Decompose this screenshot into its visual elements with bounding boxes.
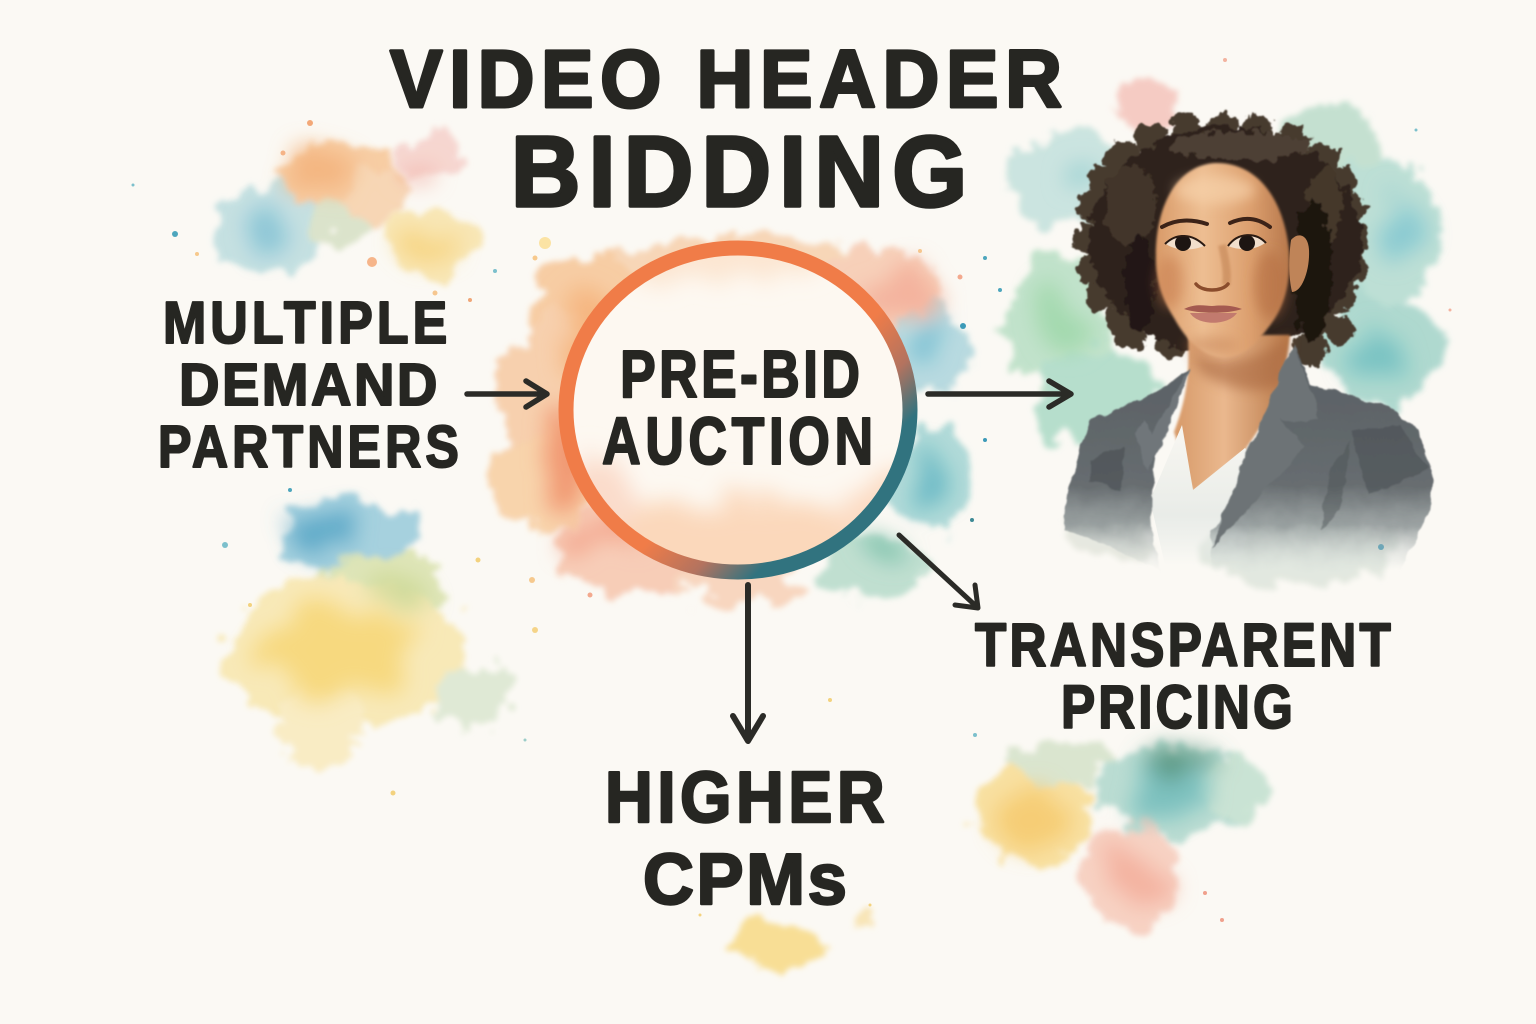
arrow: partners to auction [467,381,547,407]
label: higher CPMs: HIGHER [605,756,885,838]
label: transparent pricing: TRANSPARENT [975,611,1391,679]
lips [1184,305,1242,323]
eyes [1165,235,1266,251]
label: higher CPMs: CPMs [643,839,847,920]
label: multiple demand partners [158,290,459,480]
label: transparent pricing: PRICING [1061,673,1293,741]
cheek shading [1157,176,1286,353]
label: transparent pricing [975,611,1391,741]
eyebrows [1162,219,1270,227]
watercolor splash: lower left [227,499,515,767]
label: higher CPMs [605,756,885,920]
label: multiple demand partners: PARTNERS [158,413,459,480]
auction label: AUCTION [602,403,873,478]
arrow: auction to higher CPMs [733,585,763,741]
circle interior [568,250,908,570]
interior wash [580,256,893,564]
neck [1174,335,1290,492]
arrow: auction to portrait [928,381,1071,407]
neck shadow [1190,335,1290,390]
blazer shadows [1350,425,1428,495]
title [390,34,1062,227]
ear [1289,235,1309,292]
arrow: auction to transparent pricing [899,535,978,608]
paint splatter dots [132,58,1452,922]
blazer lapel [1212,343,1318,548]
label: multiple demand partners: MULTIPLE [163,290,447,356]
label: multiple demand partners: DEMAND [179,353,437,418]
nose [1196,245,1228,290]
gradient ring [566,248,910,572]
blazer [1063,343,1433,585]
title: BIDDING [511,115,967,227]
watercolor splash: bottom [722,914,876,969]
title: VIDEO HEADER [390,34,1062,125]
shirt [1150,425,1262,565]
watercolor splash: behind auction circle [493,238,970,603]
watercolor splash: lower right [975,742,1269,928]
portrait: watercolor woman in grey blazer [1063,112,1433,585]
auction label: PRE-BID [620,336,860,411]
face [1156,163,1289,357]
hair back [1074,112,1370,367]
pre-bid auction circle [558,240,918,580]
watercolor splash: behind portrait [1008,82,1443,584]
watercolor splash: top left [208,136,476,277]
auction label [602,336,873,478]
